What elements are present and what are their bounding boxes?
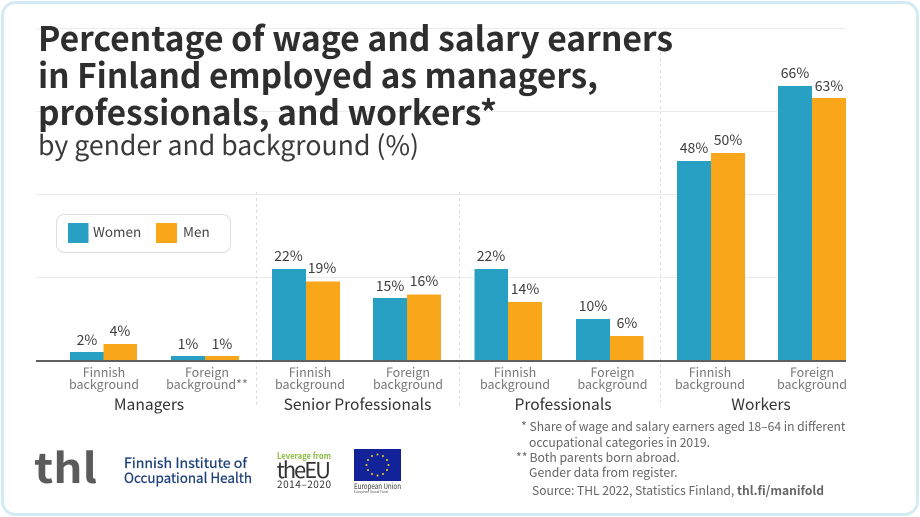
legend: Women [93,221,141,241]
group: Managers: background [69,374,139,393]
footnotes: occupational categories in 2019. [529,433,710,451]
group: Senior Professionals: Foreign [386,362,430,381]
group: Professionals: 14% [511,279,539,299]
logo: thl: thl [34,435,97,495]
group: Workers: background [675,374,745,393]
group: Workers: background [777,374,847,393]
logo: Finnish Institute of Occupational Health: Finnish Institute of [124,453,247,473]
logo: European Union flag: European Union [354,481,401,492]
group: Senior Professionals: background [373,374,443,393]
group: Senior Professionals: 22% [274,246,303,266]
group: Senior Professionals: 19% [308,258,336,278]
footnotes: ** [516,448,527,466]
group: Senior Professionals [272,246,443,415]
group: Professionals: 6% [617,313,637,333]
footnotes: Both parents born abroad. [530,448,680,466]
logo: Finnish Institute of Occupational Health [124,453,252,488]
group: Professionals: Professionals [514,393,612,415]
footnotes: Share of wage and salary earners aged 18–64 in different [530,417,846,435]
group: Managers: 2% [77,330,97,350]
group: Workers: 63% [815,76,843,96]
group: Managers: Finnish [83,362,125,381]
group: Professionals: Finnish [494,362,536,381]
group: Managers: Foreign [185,362,229,381]
logo: European Union flag: European Social Fund [354,490,388,495]
group: Senior Professionals: 15% [376,276,404,296]
group: Workers [675,63,847,415]
legend [56,214,230,252]
group: Workers: Finnish [689,362,731,381]
logo: Leverage from the EU: theEU [276,453,331,485]
title: in Finland employed as managers, [38,49,598,98]
group: Managers: Managers [114,393,184,415]
subtitle: by gender and background (%) [38,124,419,163]
group: Workers: Workers [731,393,791,415]
group: Professionals [474,246,648,415]
group: Senior Professionals: Senior Professionals [284,393,431,415]
footnotes: * [521,417,527,435]
group: Senior Professionals: Finnish [289,362,331,381]
group: Professionals: 10% [579,296,607,316]
group: Professionals: background [480,374,550,393]
group: Senior Professionals: 16% [410,271,438,291]
group: Managers: background** [166,374,248,393]
group: Managers: 1% [178,334,198,354]
bar chart [36,63,847,415]
group: Managers: 1% [212,334,232,354]
group: Managers [69,321,248,415]
logo: European Union flag [354,449,401,495]
legend: Men [183,221,210,241]
logo: Leverage from the EU: 2014–2020 [277,476,331,491]
group: Workers: 48% [680,138,708,158]
footnotes: Source: THL 2022, Statistics Finland, thl.fi/manifold [532,481,824,499]
group: Professionals: background [577,374,648,393]
logo: Finnish Institute of Occupational Health: Occupational Health [124,468,252,488]
group: Senior Professionals: background [275,374,345,393]
title: Percentage of wage and salary earners [38,12,673,61]
group: Workers: Foreign [790,362,834,381]
group: Workers: 66% [781,63,809,83]
group: Managers: 4% [110,321,130,341]
group: Workers: 50% [714,130,742,150]
group: Professionals: 22% [477,246,505,266]
logo: Leverage from the EU: Leverage from [277,449,331,462]
group: Professionals: Foreign [590,362,635,381]
footnotes [516,417,846,499]
title: professionals, and workers* [38,86,497,135]
title [38,12,673,135]
footnotes: Gender data from register. [529,463,678,481]
